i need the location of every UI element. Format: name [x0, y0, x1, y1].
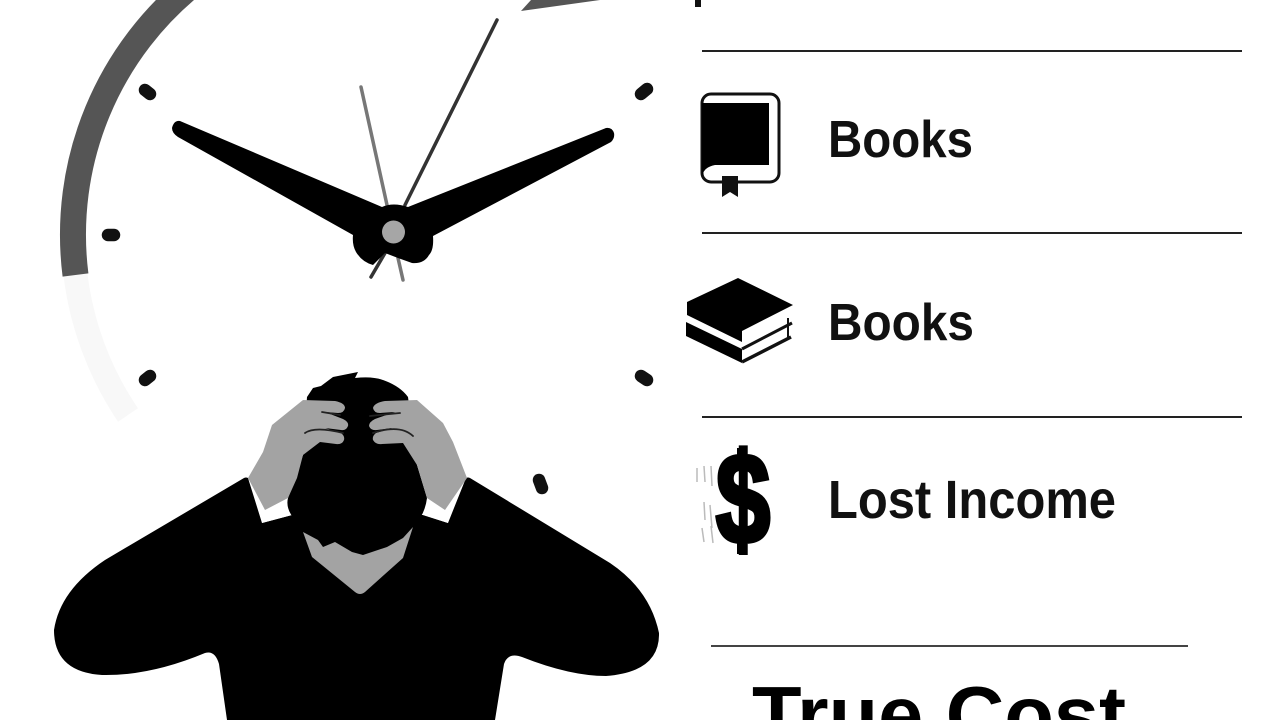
gray second hand — [361, 87, 403, 280]
icon: stack of books — [686, 278, 793, 363]
list divider lines — [702, 51, 1242, 646]
bottom book — [686, 322, 742, 363]
sweater — [54, 478, 659, 720]
clock dark arc — [73, 0, 198, 275]
head and hair — [287, 372, 427, 580]
clock faded arc — [76, 275, 128, 415]
clock center pin — [382, 220, 405, 244]
label: Lost Income: Lost Income — [828, 470, 1116, 530]
book cover — [702, 103, 769, 176]
clock arc top fragment — [521, 0, 600, 11]
stressed person — [54, 372, 659, 720]
hour ticks — [108, 89, 647, 488]
right hand — [369, 400, 467, 510]
finger creases — [305, 412, 413, 436]
icon: dollar sign — [697, 428, 770, 571]
clipped top item fragment — [695, 0, 701, 7]
left hand — [248, 400, 348, 510]
dollar glyph: $ — [716, 428, 770, 571]
clock — [73, 0, 647, 488]
neck and chin — [303, 527, 413, 594]
icon: closed book — [702, 94, 779, 197]
bookmark — [722, 176, 738, 197]
page edges — [742, 318, 792, 362]
dark second hand — [371, 20, 497, 277]
left white cuff — [262, 498, 292, 523]
label: Books: Books — [828, 111, 973, 169]
label: Books: Books — [828, 294, 974, 352]
dollar glitch marks — [697, 466, 713, 543]
dollar stem top — [737, 448, 747, 466]
top book — [687, 278, 793, 342]
right white cuff — [423, 498, 448, 523]
book outline — [702, 94, 779, 182]
dollar stem bottom — [737, 538, 747, 554]
clock hands and hub — [172, 121, 614, 265]
